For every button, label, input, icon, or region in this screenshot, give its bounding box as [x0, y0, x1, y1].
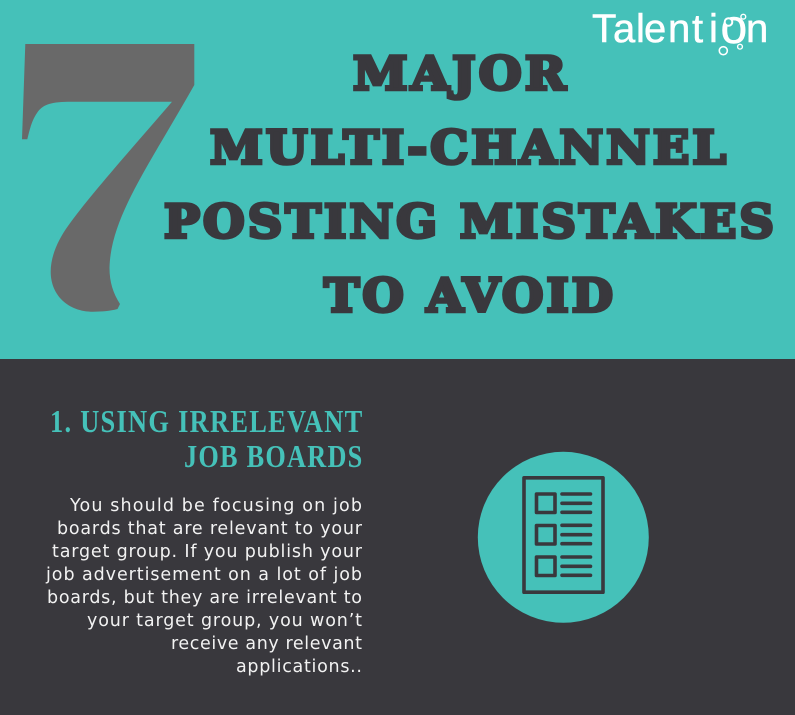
- body text: boards that are relevant to your: [57, 519, 363, 539]
- title: POSTING MISTAKES: [164, 194, 777, 248]
- big numeral 7: [22, 44, 194, 312]
- logo: Talention: Talenti: [592, 7, 718, 51]
- body text: target group. If you publish your: [52, 542, 363, 562]
- title: [164, 46, 777, 322]
- body text: job advertisement on a lot of job: [45, 565, 362, 585]
- body text: boards, but they are irrelevant to: [47, 588, 362, 608]
- icon: checklist document in circle: [478, 452, 649, 623]
- heading: using irrelevant job boards: 1. USING IRRELEVANT: [50, 404, 364, 439]
- body text: [45, 496, 363, 677]
- heading: using irrelevant job boards: JOB BOARDS: [184, 439, 364, 474]
- panel: teal header background: [0, 0, 795, 359]
- body text: your target group, you won’t: [87, 611, 362, 631]
- body text: applications..: [236, 657, 362, 677]
- logo: Talention: [592, 1, 768, 55]
- logo: Talention: n: [746, 7, 768, 51]
- title: MULTI-CHANNEL: [210, 120, 729, 174]
- body text: receive any relevant: [171, 634, 362, 654]
- panel: dark section background: [0, 359, 795, 715]
- heading: using irrelevant job boards: [50, 404, 364, 474]
- body text: You should be focusing on job: [69, 496, 362, 516]
- title: MAJOR: [353, 46, 569, 100]
- logo: Talention: o: [720, 1, 747, 54]
- title: TO AVOID: [324, 268, 616, 322]
